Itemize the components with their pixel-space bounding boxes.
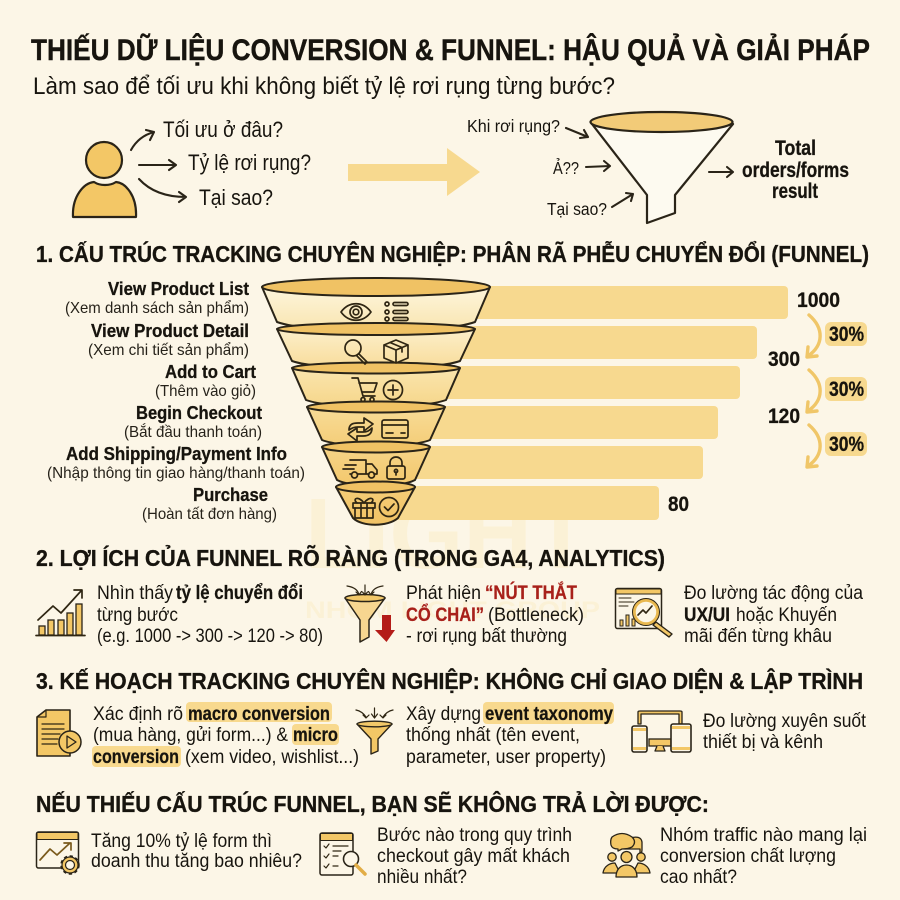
text: conversion chất lượng: [660, 846, 836, 867]
panel: simple funnel: [467, 112, 849, 223]
panel: funnel stage labels: (Xem danh sách sản phẩm): [65, 299, 249, 317]
panel: benefit 2: [345, 582, 584, 647]
funnel layer 4: [307, 402, 445, 446]
text: hoặc Khuyến: [736, 605, 837, 626]
text: Đo lường tác động của: [684, 583, 863, 604]
panel: funnel stage labels: (Thêm vào giỏ): [155, 383, 256, 400]
icon: gift and check: [353, 498, 398, 518]
text: - rơi rụng bất thường: [406, 626, 567, 647]
text: micro: [293, 725, 338, 746]
text: thống nhất (tên event,: [406, 725, 580, 746]
icon: checklist with magnifier: [320, 833, 365, 875]
panel: funnel stage labels: Purchase: [193, 484, 268, 505]
funnel layer 6: [336, 482, 415, 525]
text highlights: [92, 702, 339, 767]
rate badges: 30%: [829, 433, 864, 456]
text: parameter, user property): [406, 747, 606, 768]
text highlight: [483, 702, 614, 724]
subtitle: Làm sao để tối ưu khi không biết tỷ lệ rơi rụng từng bước?: [33, 73, 615, 100]
funnel questions: Tại sao?: [547, 199, 607, 219]
funnel layer 1: [262, 278, 490, 331]
text: [660, 825, 867, 888]
rate badges: [825, 322, 867, 456]
panel: question 1: [36, 831, 302, 873]
text: [406, 582, 584, 647]
arrow to result: [709, 167, 733, 177]
text: UX/UI: [684, 605, 730, 626]
panel: funnel stage labels: (Bắt đầu thanh toán): [124, 422, 262, 441]
value 300: 300: [768, 348, 800, 371]
icon: magnifier and box: [345, 340, 408, 364]
funnel result: Total: [775, 137, 816, 160]
text: Phát hiện: [406, 583, 481, 604]
text: (mua hàng, gửi form...) &: [93, 725, 288, 746]
text: conversion: [93, 747, 179, 768]
panel: plan 3: [632, 711, 867, 753]
arrow: big transition: [348, 148, 480, 196]
text: [684, 583, 863, 647]
text: event taxonomy: [485, 704, 613, 725]
text: CỔ CHAI”: [406, 604, 484, 626]
panel: funnel stage labels: View Product Detail: [91, 320, 249, 341]
text: [97, 583, 323, 647]
funnel layer 5: [322, 442, 430, 486]
icon: document with play: [37, 710, 81, 756]
text: cao nhất?: [660, 867, 737, 888]
funnel questions: Ả??: [553, 157, 579, 178]
text: mãi đến từng khâu: [684, 626, 832, 647]
text: Xác định rõ: [93, 704, 183, 725]
text: doanh thu tăng bao nhiêu?: [91, 851, 302, 872]
text: nhiều nhất?: [377, 867, 467, 888]
text: Đo lường xuyên suốt: [703, 711, 867, 732]
icon: funnel with red arrow: [345, 585, 395, 642]
rate badges: 30%: [829, 323, 864, 346]
icon: user: [73, 142, 136, 217]
funnel questions: [467, 116, 633, 219]
panel: funnel stage labels: Add Shipping/Payment Info: [66, 443, 287, 464]
text: Nhóm traffic nào mang lại: [660, 825, 867, 846]
icon: eye and list: [341, 302, 408, 321]
panel: benefit 1: [36, 583, 323, 647]
funnel layer 3: [292, 362, 460, 407]
value 120: 120: [768, 405, 800, 428]
icon: funnel: [356, 708, 393, 754]
questions: [163, 117, 311, 210]
panel: funnel values and drop rates: [668, 289, 867, 516]
panel: funnel stage labels: View Product List: [108, 278, 249, 299]
questions: Tỷ lệ rơi rụng?: [188, 150, 311, 175]
icon: growth chart: [36, 590, 85, 636]
text: [377, 825, 572, 888]
icon: cart and plus: [352, 378, 402, 402]
text: Nhìn thấy: [97, 583, 173, 604]
icon: exchange and card: [348, 418, 408, 441]
funnel result: orders/forms: [742, 159, 849, 182]
questions: Tối ưu ở đâu?: [163, 117, 283, 142]
watermark: LIGHT: [305, 478, 590, 590]
heading: section 4: NẾU THIẾU CẤU TRÚC FUNNEL, BẠN SẼ KHÔNG TRẢ LỜI ĐƯỢC:: [36, 789, 709, 817]
text: [91, 831, 302, 872]
icon: devices: [632, 711, 691, 752]
arrows from user: [131, 130, 186, 202]
panel: question 3: [603, 825, 867, 888]
icon: people with speech bubbles: [603, 834, 650, 877]
text: Bước nào trong quy trình: [377, 825, 572, 846]
text: tỷ lệ chuyển đổi: [176, 583, 303, 604]
icon: browser with chart and gear: [36, 832, 78, 873]
funnel result: [742, 137, 849, 203]
panel: funnel stage labels: (Xem chi tiết sản phẩm): [88, 341, 249, 359]
text: Xây dựng: [406, 704, 481, 725]
text: [703, 711, 867, 753]
text: từng bước: [97, 605, 178, 626]
panel: funnel stage labels: Begin Checkout: [136, 402, 262, 423]
panel: funnel stage labels: (Hoàn tất đơn hàng): [142, 506, 277, 523]
text: checkout gây mất khách: [377, 846, 570, 867]
panel: user questions: [73, 117, 311, 217]
text: macro conversion: [188, 704, 330, 725]
text: (e.g. 1000 -> 300 -> 120 -> 80): [97, 626, 323, 647]
funnel questions: Khi rơi rụng?: [467, 116, 560, 136]
panel: plan 2: [356, 702, 614, 768]
drop arrows: [807, 315, 820, 467]
text: “NÚT THẮT: [485, 582, 577, 604]
heading: section 2: 2. LỢI ÍCH CỦA FUNNEL RÕ RÀNG (TRONG GA4, ANALYTICS): [36, 543, 665, 571]
watermark: NHÓM LIGHT GROUP: [305, 596, 600, 624]
rate badges: 30%: [829, 378, 864, 401]
panel: plan 1: [37, 702, 359, 768]
text: (xem video, wishlist...): [185, 747, 359, 768]
text: Tăng 10% tỷ lệ form thì: [91, 831, 272, 852]
panel: funnel stage labels: [47, 278, 305, 523]
value 80: 80: [668, 493, 689, 516]
text: [93, 704, 359, 768]
icon: truck and lock: [343, 457, 405, 479]
value 1000: 1000: [797, 289, 840, 312]
chart: conversion funnel layers: [262, 278, 490, 525]
text: (Bottleneck): [488, 605, 584, 626]
icon: report with magnifier: [616, 588, 672, 637]
text: [406, 704, 613, 768]
bar chart: funnel volumes: [380, 286, 788, 520]
icon: funnel: [590, 112, 733, 223]
panel: benefit 3: [616, 583, 863, 647]
panel: funnel stage labels: Add to Cart: [165, 361, 256, 382]
panel: question 2: [320, 825, 572, 888]
panel: funnel stage labels: (Nhập thông tin giao hàng/thanh toán): [47, 465, 305, 482]
questions: Tại sao?: [199, 185, 273, 210]
text: thiết bị và kênh: [703, 732, 823, 753]
funnel layer 2: [277, 323, 475, 368]
funnel result: result: [772, 180, 818, 203]
